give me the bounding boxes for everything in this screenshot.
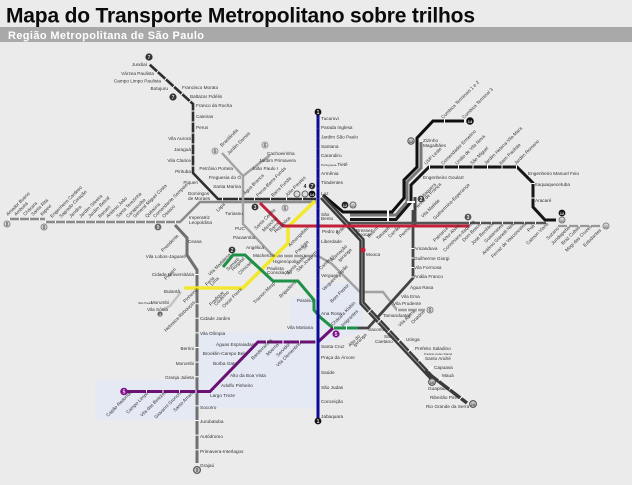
badge line 2 east: 2	[420, 197, 423, 203]
badge line 10 south	[470, 401, 476, 407]
station labels: rotated: Jardim Belval	[87, 195, 111, 219]
station labels: rotated: Oscar Freire	[221, 286, 243, 309]
badge line 8 mid	[41, 224, 47, 231]
station labels: rotated: Jardim Helena-Vila Mara	[483, 125, 523, 166]
badge gray west: 6	[284, 206, 287, 212]
station labels: rotated: Anhangabaú	[287, 225, 310, 248]
station labels: horizontal: Jabaquara	[321, 414, 344, 419]
station labels: horizontal: Vila Olímpia	[200, 331, 226, 336]
station labels: horizontal: Santo André	[425, 356, 451, 361]
station labels: rotated: Cambuci	[318, 254, 335, 271]
station labels: rotated: Servidor	[275, 342, 291, 358]
station labels: horizontal: Santa Cruz	[321, 344, 345, 349]
station labels: rotated: Giovanni Gronchi	[153, 391, 182, 420]
station labels: horizontal: Mooca	[356, 232, 370, 237]
badge line 6 east	[427, 307, 433, 314]
badge line 1 south	[315, 418, 321, 425]
station labels: horizontal: Liberdade	[321, 239, 342, 244]
station labels: horizontal: São Judas	[321, 385, 344, 390]
line 11 and 12: dark route to Calmon Viana	[350, 167, 556, 226]
station labels: horizontal: João Paulo I	[252, 166, 278, 171]
station labels: horizontal: Prefeito Celso Daniel	[424, 352, 453, 356]
line 4 branch: Butantã to Vila Sônia	[162, 292, 181, 310]
station labels: rotated: Júlio Prestes	[284, 175, 307, 198]
station labels: rotated: Comendador Ermelino	[440, 129, 477, 166]
station labels: rotated: São Joaquim	[295, 250, 318, 273]
station labels: rotated: Jardim Romano	[513, 138, 540, 166]
station labels: rotated: Campo Limpo	[125, 390, 150, 415]
badge line 4: 4	[159, 312, 162, 317]
station labels: rotated: Cumbica Terminais 1 e 2	[440, 79, 480, 120]
station labels: rotated: Antônio Gianetti Neto	[481, 220, 516, 256]
station labels: rotated: Brigadeiro	[278, 280, 297, 299]
badge line 3 east	[465, 214, 471, 221]
station labels: rotated: Santa Isabel	[285, 254, 307, 276]
badges at Luz: 7	[311, 184, 314, 190]
station labels: horizontal: Água Rasa	[410, 284, 434, 290]
badge line 5 west: 5	[123, 390, 126, 396]
station labels: horizontal: Consolação	[267, 270, 292, 275]
station labels: rotated: Hebraica-Rebouças	[163, 299, 196, 333]
station labels: rotated: Vergueiro Japão	[321, 264, 349, 292]
station labels: rotated: Hospital	[230, 256, 246, 272]
station labels: horizontal: Tucuruvi	[321, 116, 339, 121]
station labels: horizontal: Águas Espraiadas	[216, 341, 255, 347]
station labels: rotated: Calmon Viana	[525, 221, 550, 246]
station labels: horizontal: Paraíso	[297, 298, 313, 303]
station labels: rotated: Carapicuíba	[125, 197, 147, 219]
station labels: horizontal: Várzea Paulista	[121, 71, 154, 76]
station labels: horizontal: Magalhães	[423, 143, 447, 148]
station labels: horizontal: Primavera-Interlagos	[200, 449, 244, 454]
station labels: rotated: Aclimação	[329, 244, 348, 263]
station labels: rotated: Santo Amaro	[172, 390, 195, 413]
station labels: horizontal: Tamanduateí	[383, 313, 411, 318]
badge line 1 north	[315, 109, 321, 116]
badge line 9 north: 9	[157, 225, 160, 231]
station labels: horizontal: Guilherme Giorgi	[414, 256, 449, 261]
line 2: green	[223, 255, 358, 328]
station labels: horizontal: Rio Grande da Serra	[426, 404, 470, 409]
badge line 14: 14	[468, 119, 473, 124]
station labels: horizontal: Vila Ema	[401, 294, 420, 299]
station labels: horizontal	[114, 62, 579, 468]
line 8: Amador Bueno to Júlio Prestes	[9, 202, 316, 222]
station labels: rotated: Vila Alpina	[397, 308, 416, 328]
station labels: horizontal: Carandiru	[321, 153, 342, 158]
station labels: rotated: Vila Clementino	[275, 341, 302, 368]
station labels: rotated: Chácara Klabin	[330, 300, 357, 327]
station labels: rotated: Barra Funda	[270, 175, 292, 198]
station labels: rotated: Itaquera	[421, 182, 437, 198]
badge line 10 south: 10	[471, 402, 476, 407]
station labels: rotated: Oratório	[410, 309, 426, 325]
station labels: rotated: Ambuitá	[13, 201, 29, 217]
badge line 12 east: 12	[560, 211, 565, 216]
station labels: horizontal: Autódromo	[200, 434, 223, 439]
station labels: rotated: Itapevi	[39, 203, 52, 217]
station labels: rotated: Barra	[268, 221, 280, 233]
badges 12 and 11 at Brás: 11	[351, 203, 356, 208]
station labels: rotated: Carrão	[387, 225, 401, 239]
station labels: rotated: Presidente	[160, 233, 180, 253]
station labels: horizontal: Pedro II	[322, 229, 338, 234]
station labels: rotated: Dom Bosco	[461, 222, 482, 243]
station labels: horizontal: Alto da Boa Vista	[230, 373, 266, 378]
station labels: horizontal: Botujuru	[151, 86, 168, 91]
station labels: horizontal: Domingos	[188, 191, 210, 196]
badge line 9 south	[194, 467, 200, 474]
station labels: horizontal: Aracaré	[535, 198, 552, 203]
station labels: horizontal: Pirituba	[175, 169, 191, 174]
station labels: rotated: Sagrado Coração	[58, 189, 88, 219]
station labels: rotated: Corinthians-Itaquera	[442, 219, 476, 253]
station labels: horizontal: Mauá	[442, 373, 454, 378]
station labels: rotated: Belém	[366, 226, 379, 239]
station labels: horizontal: Cachoeirinha	[267, 151, 295, 156]
station labels: horizontal: Morumbi	[151, 300, 169, 305]
station labels: rotated: Vila Madalena	[207, 252, 232, 277]
station labels: horizontal: Ceasa	[188, 239, 202, 244]
badge line 7 north: 7	[148, 55, 151, 61]
line 7: Jundiaí to Luz	[149, 64, 316, 199]
line 5: purple	[124, 328, 333, 392]
station labels: rotated: Osasco	[161, 204, 176, 219]
station labels: horizontal: Portuguesa-Tietê	[321, 162, 348, 167]
badge line 6 brasilandia: 6	[214, 149, 217, 155]
station labels: rotated: Marechal	[261, 216, 278, 233]
station labels: horizontal: Engenheiro Manuel Feio	[528, 171, 579, 176]
badge line 6 brasilandia	[212, 148, 218, 155]
badges at Luz	[294, 183, 315, 197]
station labels: horizontal: Morumbi	[176, 361, 194, 366]
badge line 2: 2	[231, 248, 234, 254]
station labels: rotated: Moema	[265, 342, 280, 357]
station labels: rotated: Guilhermina-Esperança	[432, 182, 471, 221]
station labels: horizontal: Saúde	[321, 370, 335, 375]
station labels: horizontal: Armênia	[321, 171, 339, 176]
station labels: horizontal: Brooklin-Campo Belo	[203, 351, 247, 356]
station labels: horizontal: Imperatriz	[189, 215, 210, 220]
station labels: rotated: USP Leste	[423, 146, 443, 166]
station labels: rotated: Ipiranga	[352, 332, 368, 348]
station labels: horizontal: Granja Julieta	[165, 375, 194, 380]
station labels: horizontal: Jaraguá	[174, 147, 191, 152]
station labels: rotated: Comandante Sampaio	[152, 182, 189, 219]
station labels: rotated: Artur Alvim	[441, 223, 461, 243]
station labels: horizontal: Adolfo Pinheiro	[221, 383, 253, 388]
station labels: horizontal: Perus	[196, 125, 209, 130]
station labels: horizontal: Mackenzie	[253, 253, 276, 258]
badge line 1 south: 1	[317, 419, 320, 425]
station labels: horizontal: Campo Limpo Paulista	[114, 78, 161, 84]
station labels: horizontal: Santana	[321, 144, 339, 149]
badges 12 and 11 at Brás: 12	[343, 203, 348, 208]
line 3 red east section	[316, 224, 469, 228]
station labels: rotated: Fradique	[208, 290, 225, 307]
highlight area: south zone	[95, 283, 363, 420]
station labels: rotated: Estudantes	[582, 227, 603, 248]
station labels: horizontal: Bento	[321, 216, 334, 221]
station labels: horizontal: Utinga	[406, 337, 420, 342]
station labels: horizontal: Caieiras	[196, 114, 214, 119]
station labels: rotated: Penha de França	[413, 181, 442, 211]
line 9: Osasco to Grajaú	[175, 225, 197, 463]
station labels: horizontal: Jardim São Paulo	[321, 134, 358, 140]
station labels: rotated: Pinheiros	[182, 286, 200, 304]
badge line 14	[466, 117, 474, 125]
station labels: horizontal: São Paulo	[138, 301, 152, 305]
badge line 2	[229, 247, 235, 254]
subtitle band: Região Metropolitana de São Paulo	[8, 30, 204, 42]
station labels: rotated: Sé	[301, 243, 309, 251]
station labels: rotated: Itaim Paulista	[498, 142, 522, 166]
badge line 11 east: 11	[560, 218, 565, 223]
lines 10 and 11 diagonal trunk	[322, 197, 467, 403]
station labels: rotated: Penha	[398, 225, 412, 239]
station labels: horizontal: Vila Prudente	[393, 301, 421, 306]
station labels: rotated: Jardim Damas	[226, 130, 252, 156]
station labels: rotated: Barueri	[97, 204, 111, 219]
station labels: horizontal: Grajaú	[200, 463, 214, 468]
station labels: rotated: Capão Redondo	[105, 390, 133, 418]
badge line 12 north: 12	[409, 139, 414, 144]
station labels: rotated: Ferraz de Vasconcelos	[490, 221, 528, 259]
station labels: horizontal: Largo Treze	[210, 393, 235, 398]
station labels: rotated: Poá	[526, 223, 536, 233]
station labels: horizontal: Angélica	[246, 245, 264, 250]
badge line 7 north	[145, 53, 153, 61]
station labels: horizontal: Vila Sônia	[147, 307, 168, 312]
station labels: horizontal: Engenheiro Goulart	[423, 175, 464, 180]
badge line 8 west: 8	[6, 222, 9, 228]
station labels: rotated: Lapa	[215, 202, 226, 213]
station labels: rotated: Antônio João	[105, 196, 128, 219]
station labels: rotated: Piqueri	[163, 267, 177, 281]
station labels: horizontal: PUC	[235, 226, 246, 231]
station labels: rotated: Suzano	[545, 226, 560, 241]
station labels: horizontal: Luz	[321, 191, 329, 196]
line 3: red	[260, 203, 316, 226]
station labels: rotated: Brás	[335, 225, 346, 236]
station labels: horizontal: Prefeito Saladino	[415, 346, 451, 351]
line 15 / Tamanduateí dark route	[358, 197, 415, 328]
badge line 7 branch: 7	[172, 95, 175, 101]
station labels: rotated: Santa Rita	[30, 197, 49, 217]
station labels: rotated: Faria	[204, 275, 216, 287]
line 12: dark to Zizinho Magalhães	[350, 142, 421, 215]
station labels: rotated: União de Vila Nova	[454, 134, 486, 166]
station labels: horizontal: Sacomã	[368, 327, 386, 332]
station labels: rotated: Ipiranga	[337, 247, 353, 263]
station labels: rotated: José Bonifácio	[470, 220, 496, 246]
station labels: rotated: Tatuapé	[375, 225, 391, 241]
station labels: rotated: Jardim Silveira	[78, 193, 104, 219]
badge line 6 east: 6	[429, 308, 432, 314]
station labels: rotated: Bandeirantes	[250, 337, 274, 361]
station labels: rotated: Vila das Belezas	[139, 389, 168, 418]
station labels: horizontal: Butantã	[164, 289, 180, 294]
station labels: horizontal: São	[384, 334, 393, 339]
subtitle band	[0, 27, 632, 42]
station labels: rotated: Coutinho	[213, 290, 230, 307]
line 13: black to Cumbica	[323, 121, 464, 212]
badge line 8 mid: 8	[43, 225, 46, 231]
station labels: horizontal: Baltazar Fidélis	[190, 94, 223, 99]
station labels: horizontal: Socorro	[200, 405, 217, 410]
station labels: horizontal: Parada Inglesa	[321, 125, 353, 130]
station labels: rotated: Imigrantes	[340, 308, 360, 328]
station labels: horizontal: Higienópolis	[273, 259, 299, 264]
station labels: horizontal: Santa Marina	[213, 184, 241, 189]
station labels: rotated: Jundiapeba	[550, 225, 571, 246]
station labels: rotated: Chácara	[22, 200, 39, 217]
station labels: horizontal: Piqueri	[183, 180, 198, 185]
station labels: rotated: General Miguel Costa	[132, 183, 168, 219]
badge line 11 east	[559, 217, 565, 223]
badge gray west	[282, 205, 288, 212]
badge line 5 east	[332, 330, 340, 338]
badge line 9 south: 9	[196, 468, 199, 474]
badge line 10	[429, 379, 435, 385]
station labels: horizontal: Cidade Jardim	[200, 316, 230, 321]
line 6: gray route	[222, 153, 425, 310]
station labels: rotated: São Miguel	[469, 146, 489, 166]
station labels: horizontal: Jardim Primavera	[259, 158, 296, 163]
station labels: horizontal: Vila Formosa	[414, 265, 442, 270]
badge line 6 cachoeirinha: 6	[264, 143, 267, 149]
badge line 12 east	[559, 210, 565, 216]
station labels: horizontal: Bresser	[356, 228, 373, 233]
station labels: rotated: Vila Matilde	[420, 198, 441, 219]
station labels: rotated: Sumaré	[225, 256, 241, 272]
badge line 2 east	[418, 196, 424, 203]
station labels: rotated: Jandira	[68, 204, 83, 219]
badge line 11 terminal: 11	[604, 224, 609, 229]
station labels: horizontal: Vila Mariana	[287, 325, 313, 330]
station labels: horizontal: Jurubatuba	[200, 419, 224, 424]
badge line 5 east: 5	[335, 332, 338, 338]
badges 12 and 11 at Brás	[342, 202, 356, 208]
badges at Luz: 4	[304, 184, 307, 190]
station labels: rotated: Mogi das Cruzes	[564, 224, 593, 253]
station labels: horizontal: Capuava	[434, 365, 453, 370]
badge line 3 west: 3	[254, 205, 257, 211]
line 4: yellow	[184, 201, 315, 288]
station labels: rotated: Amador Bueno	[5, 191, 31, 217]
station labels: horizontal: Ana Rosa	[321, 311, 342, 316]
station labels: horizontal: Freguesia do Ó	[209, 174, 241, 180]
station labels: rotated: Perus-Barra Funda	[255, 166, 287, 198]
station labels: horizontal: Vergueiro	[321, 273, 341, 278]
station labels: horizontal: Conceição	[321, 399, 344, 404]
station labels: horizontal: Itaquaquecetuba	[535, 182, 570, 187]
station labels: horizontal: Vila Clarice	[167, 158, 191, 163]
Mooca red station marker	[360, 247, 366, 253]
station labels: horizontal: de Moraes	[188, 196, 211, 201]
badge line 7 branch	[169, 93, 177, 101]
badge line 11 terminal	[603, 223, 609, 229]
badge line 4	[157, 311, 163, 317]
station labels: horizontal: Tiradentes	[321, 180, 344, 185]
station labels: horizontal: Mooca	[366, 252, 380, 257]
station labels: rotated: Engenheiro Cardoso	[49, 184, 83, 219]
station labels: horizontal: Francisco Morato	[182, 85, 219, 90]
station labels: rotated: Paulista	[294, 239, 310, 255]
badge line 3 east: 3	[467, 215, 470, 221]
badge line 1 north: 1	[317, 110, 320, 116]
station labels: rotated: Santa Terezinha	[115, 191, 143, 219]
station labels: horizontal: São	[321, 212, 330, 217]
badge line 5 west	[120, 388, 128, 396]
badge line 10: 10	[430, 380, 435, 385]
station labels: rotated: República	[273, 215, 292, 234]
station labels: horizontal: Leopoldina	[189, 220, 212, 225]
station labels: rotated: Lima	[209, 276, 220, 287]
station labels: rotated: Bom Pastor	[329, 283, 350, 304]
station labels: horizontal: Anália Franco	[414, 274, 443, 279]
title: Mapa do Transporte Metropolitano sobre trilhos	[6, 4, 475, 28]
station labels: rotated: Cumbica Terminal 3	[461, 87, 494, 120]
badges at Luz: 14	[310, 192, 315, 197]
station labels: rotated: Quitaúna	[144, 201, 161, 219]
badge line 3 west	[252, 204, 258, 211]
station labels: horizontal: Jundiaí	[132, 62, 148, 67]
station labels: horizontal: Zizinho	[423, 138, 439, 143]
station labels: horizontal: Vila Lobos-Jaguaré	[146, 254, 186, 259]
station labels: horizontal: Caetano	[375, 339, 393, 344]
station labels: horizontal: Cidade Universitária	[152, 272, 194, 277]
badge line 8 west	[4, 221, 10, 228]
station labels: horizontal: Pacaembu	[233, 235, 256, 240]
station labels: horizontal: Petrônio Portela	[199, 166, 233, 171]
station labels: rotated: Trianon-Masp	[252, 281, 276, 305]
station labels: rotated: Guaianases	[483, 222, 505, 244]
station labels: horizontal: Borba Gato	[213, 361, 237, 366]
station labels: horizontal: Praça da Árvore	[321, 354, 355, 360]
line 11: east trunk	[348, 223, 601, 226]
station labels: rotated: Água Branca	[241, 172, 265, 196]
station labels: rotated: Alto do	[347, 334, 361, 348]
station labels: horizontal: Vila Aurora	[168, 136, 191, 141]
station labels: rotated: Braz Cubas	[560, 224, 581, 246]
station labels: horizontal: Franco da Rocha	[196, 103, 232, 108]
badge line 6 cachoeirinha	[262, 142, 268, 149]
line 1: blue	[316, 113, 320, 420]
station labels: rotated	[5, 79, 603, 420]
station labels: rotated: Brasilândia	[219, 127, 239, 148]
station labels: horizontal: Paulista	[267, 266, 284, 271]
station labels: rotated: Patriarca	[432, 226, 449, 243]
station labels: horizontal: Ribeirão Pires	[430, 395, 460, 400]
station labels: horizontal: Guapituba	[428, 386, 450, 391]
badge line 9 north	[155, 224, 161, 231]
station labels: horizontal: Turiassu	[225, 211, 243, 216]
badge line 12 north	[408, 138, 414, 144]
station labels: rotated: Santa Cecília	[253, 207, 277, 231]
station labels: horizontal: Aricanduva	[414, 246, 438, 251]
station labels: horizontal: Berrini	[180, 346, 194, 351]
station labels: rotated: Clínicas	[237, 260, 253, 276]
